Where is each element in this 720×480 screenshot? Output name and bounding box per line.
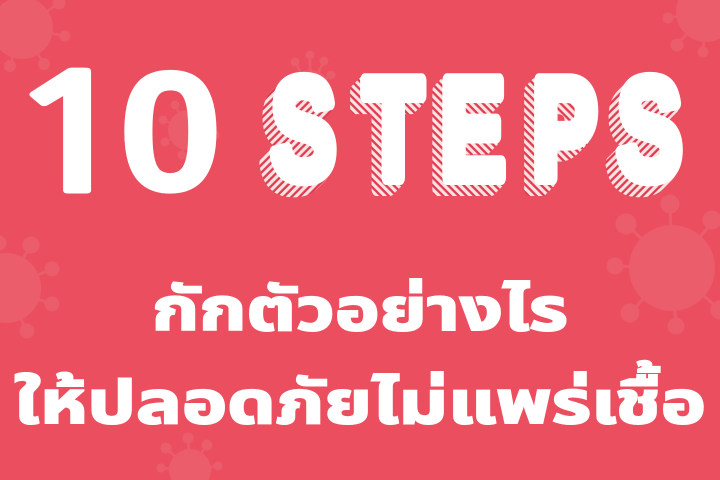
title number: 1: 1	[1, 56, 143, 217]
hatched shadow of S letters	[259, 84, 678, 198]
icon: virus behind steps	[290, 51, 335, 110]
title number: 0: 0	[118, 36, 223, 228]
white face of STEPS: STEPS	[271, 49, 682, 208]
icon: virus top right	[663, 0, 720, 57]
icon: virus bottom	[157, 433, 222, 480]
icon: virus right	[607, 195, 720, 334]
heading line 2: ให้ปลอดภัยไม่แพร่เชื้อ	[14, 360, 706, 436]
heading line 1: กักตัวอย่างไร	[152, 276, 568, 343]
icon: virus left	[0, 236, 59, 338]
icon: virus behind ten	[159, 101, 219, 159]
title word: STEPS	[259, 72, 683, 198]
icon: virus top left	[0, 0, 70, 72]
hatched shadow of T, E, P letters	[350, 76, 591, 196]
